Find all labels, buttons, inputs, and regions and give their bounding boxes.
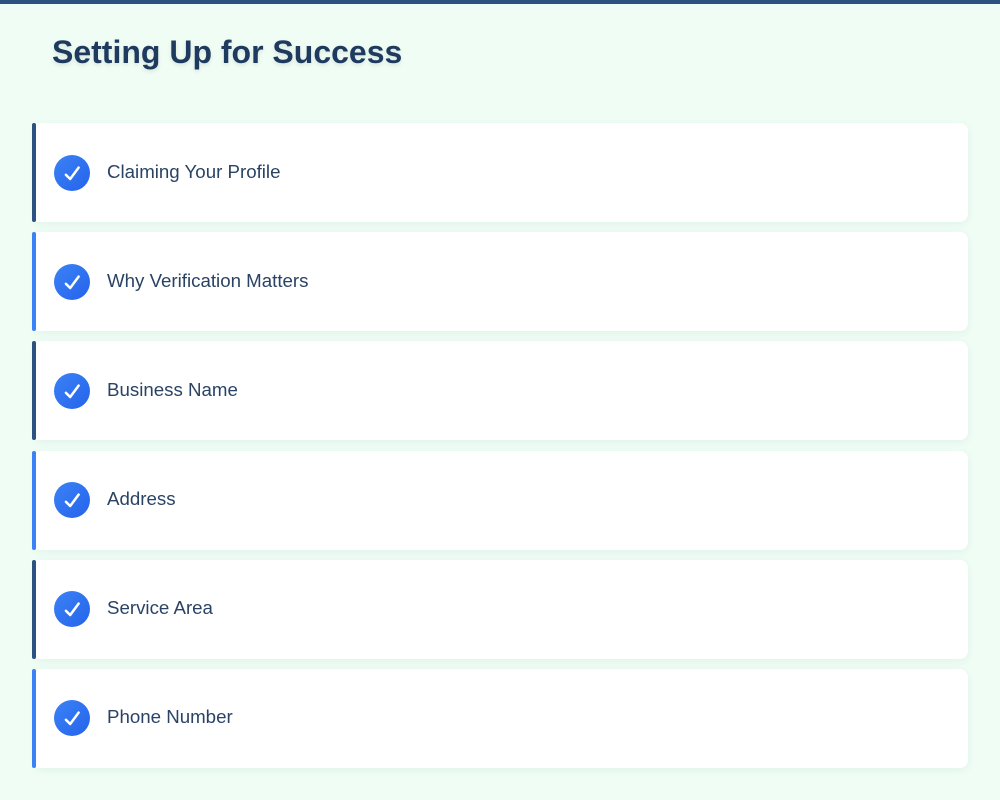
icon: check [54, 591, 90, 627]
icon: check [54, 700, 90, 736]
label: Service Area [107, 597, 213, 618]
icon: check [54, 264, 90, 300]
panel: Phone Number [32, 669, 968, 770]
panel: Claiming Your Profile [32, 123, 968, 224]
panel: Business Name [32, 341, 968, 442]
icon: check [54, 482, 90, 518]
icon: check [54, 373, 90, 409]
label: Why Verification Matters [107, 270, 308, 291]
label: Business Name [107, 379, 238, 400]
title: Setting Up for Success [52, 34, 402, 70]
top bar [0, 0, 1000, 4]
panel: Service Area [32, 560, 968, 660]
panel: Why Verification Matters [32, 232, 968, 332]
panel: Address [32, 451, 968, 552]
label: Phone Number [107, 706, 233, 727]
icon: check [54, 155, 90, 191]
label: Claiming Your Profile [107, 160, 280, 182]
label: Address [107, 488, 176, 509]
